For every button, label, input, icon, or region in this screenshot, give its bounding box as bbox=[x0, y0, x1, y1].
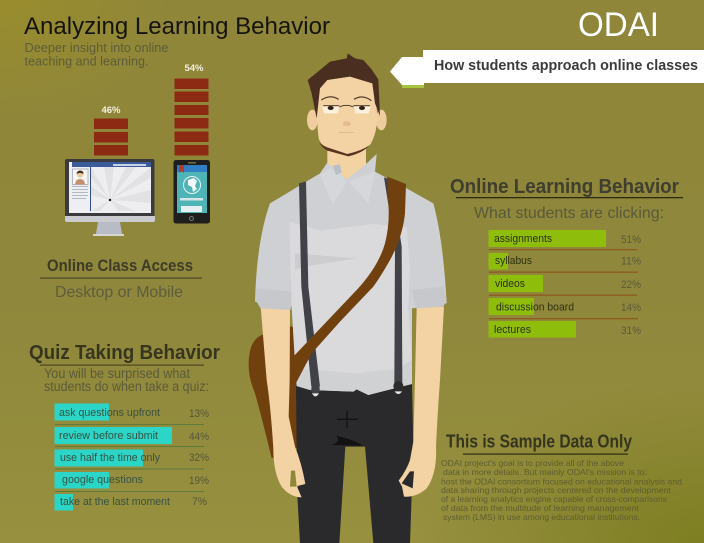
illustration: student figure bbox=[249, 53, 447, 543]
panel: device access chart bbox=[65, 63, 210, 236]
bar chart: quiz behaviors: take at the last moment bbox=[60, 496, 170, 508]
panel: quiz taking behavior bbox=[29, 342, 220, 510]
bar chart: clicks: lectures bbox=[494, 324, 531, 336]
right suspender bbox=[384, 177, 402, 385]
fly and pocket marks bbox=[331, 411, 363, 446]
heading: Online Learning Behavior: Online Learning Behavior bbox=[450, 175, 679, 198]
bar chart: clicks bbox=[488, 230, 641, 338]
bar chart: clicks: 11% bbox=[621, 256, 641, 268]
mobile bar stack bbox=[174, 78, 208, 156]
right arm bbox=[399, 307, 444, 497]
subtitle: teaching and learning. bbox=[24, 54, 148, 68]
bag strap bbox=[293, 177, 406, 385]
subtitle: Deeper insight into online bbox=[24, 40, 168, 55]
panel: sample data note bbox=[441, 432, 682, 522]
hair bbox=[308, 53, 380, 118]
bar chart: quiz behaviors: use half the time only bbox=[60, 452, 160, 464]
bar chart: clicks: discussion board bbox=[496, 302, 574, 314]
bar chart: clicks: 31% bbox=[621, 325, 641, 337]
bar chart: quiz behaviors: 44% bbox=[189, 431, 209, 443]
text: ODAI description: of data from the multitude of learning management bbox=[441, 503, 640, 513]
value: 46%: 46% bbox=[101, 105, 121, 116]
bar chart: clicks: 51% bbox=[621, 234, 641, 246]
bar chart: clicks: 22% bbox=[621, 279, 641, 291]
left arm bbox=[261, 307, 305, 497]
title: Analyzing Learning Behavior bbox=[24, 13, 330, 40]
icon: smartphone bbox=[174, 160, 210, 224]
bar chart: clicks: 14% bbox=[621, 302, 641, 314]
text: ODAI description: of a learning analytics engine capable of cross-comparisons bbox=[441, 494, 667, 504]
text: ODAI description: system (LMS) in use among educational institutions. bbox=[443, 512, 640, 522]
caption: Desktop or Mobile: Desktop or Mobile bbox=[55, 284, 183, 301]
text: ODAI description: data in more details. But mainly ODAI's mission is to: bbox=[443, 467, 647, 477]
subheading: What students are clicking: bbox=[474, 205, 664, 222]
neck bbox=[327, 147, 366, 187]
heading: Online Class Access: Online Class Access bbox=[47, 256, 193, 275]
nose and mouth bbox=[339, 121, 354, 133]
banner arrow bbox=[390, 50, 704, 88]
text: ODAI description: data sharing through projects centered on the development bbox=[441, 485, 672, 495]
bar chart: quiz behaviors: 32% bbox=[189, 452, 209, 464]
text: quiz intro bbox=[44, 366, 209, 394]
desktop bar stack bbox=[94, 118, 128, 156]
icon: desktop monitor bbox=[65, 159, 155, 236]
sleeve cuffs bbox=[255, 287, 447, 310]
bar chart: clicks: assignments bbox=[494, 233, 552, 245]
bar chart: quiz behaviors: google questions bbox=[62, 474, 143, 486]
trousers bbox=[296, 383, 413, 543]
bar chart: quiz behaviors: review before submit bbox=[59, 430, 158, 442]
bar chart: clicks: syllabus bbox=[495, 255, 532, 267]
text: ODAI description: host the ODAI consortium focused on educational analysis and bbox=[441, 476, 682, 486]
jaw shadow bbox=[319, 143, 369, 156]
logo: ODAI: ODAI bbox=[578, 6, 659, 44]
subtitle bbox=[24, 40, 168, 68]
text: ODAI description bbox=[441, 458, 682, 522]
bar chart: quiz behaviors: 13% bbox=[189, 408, 209, 420]
bag bbox=[249, 327, 298, 458]
banner arrow: How students approach online classes bbox=[434, 57, 698, 74]
bar chart: clicks: videos bbox=[495, 278, 525, 290]
text: quiz intro: students do when take a quiz: bbox=[44, 379, 209, 394]
suspender clips bbox=[311, 381, 403, 396]
text: quiz intro: You will be surprised what bbox=[44, 366, 190, 381]
ears bbox=[307, 110, 387, 130]
text: ODAI description: ODAI project's goal is to provide all of the above bbox=[441, 458, 624, 468]
bar chart: quiz behaviors: 7% bbox=[192, 496, 207, 508]
heading: Quiz Taking Behavior: Quiz Taking Behavior bbox=[29, 342, 220, 364]
panel: online learning behavior bbox=[450, 175, 683, 338]
bar chart: quiz behaviors bbox=[54, 404, 209, 510]
bar chart: quiz behaviors: 19% bbox=[189, 475, 209, 487]
heading: This is Sample Data Only: This is Sample Data Only bbox=[446, 432, 632, 452]
shirt bbox=[255, 154, 447, 395]
shirt highlights bbox=[289, 164, 412, 395]
bar chart: quiz behaviors: ask questions upfront bbox=[59, 407, 160, 419]
glasses and eyes bbox=[321, 97, 371, 113]
face bbox=[317, 73, 377, 156]
left suspender bbox=[299, 181, 320, 387]
value: 54%: 54% bbox=[184, 63, 204, 74]
